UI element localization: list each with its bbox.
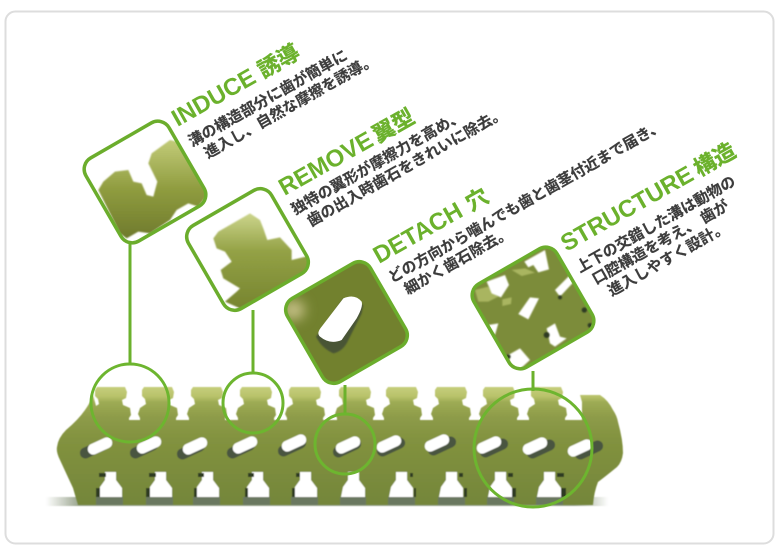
description: 進入しやすく設計。 <box>605 219 731 300</box>
description: 上下の交錯した溝は動物の <box>573 172 739 276</box>
product photo: green dental chew bar <box>46 387 623 506</box>
rounded frame <box>79 116 211 248</box>
heading: 誘導 <box>253 39 304 83</box>
bar silhouette <box>57 387 623 505</box>
dark hole edges <box>96 473 566 497</box>
heading <box>274 103 419 201</box>
connector line <box>344 385 346 415</box>
ground strip between legs <box>96 497 563 505</box>
callout: DETACH <box>280 117 675 474</box>
description: どの方向から噛んでも歯と歯茎付近まで届き、 <box>385 117 667 286</box>
heading: REMOVE <box>274 127 378 201</box>
rounded frame <box>467 242 599 374</box>
close-up photo <box>287 263 406 382</box>
slot openings <box>86 433 594 458</box>
close-up photo <box>474 248 592 367</box>
connector line <box>532 371 534 391</box>
zoom circle on bar <box>315 414 375 474</box>
heading: 翼型 <box>368 104 419 147</box>
heading: DETACH <box>369 197 467 269</box>
description: 進入し、自然な摩擦を誘導。 <box>201 51 380 162</box>
heading: 穴 <box>461 184 493 216</box>
description: 口腔構造を考え、 歯が <box>589 197 732 288</box>
heading <box>369 183 493 269</box>
slot shadows <box>78 435 605 461</box>
description: 細かく歯石除去。 <box>401 223 514 298</box>
description: 歯の出入時歯石をきれいに除去。 <box>304 104 509 230</box>
callout: STRUCTURE <box>465 137 756 507</box>
bottom gaps between legs <box>98 472 561 497</box>
heading: STRUCTURE <box>556 161 698 257</box>
ground shadow <box>46 497 608 506</box>
description <box>573 172 756 308</box>
heading <box>556 137 740 257</box>
description: 溝の構造部分に歯が簡単に <box>185 46 351 150</box>
rounded frame <box>281 257 412 388</box>
zoom circle on bar <box>474 389 592 507</box>
callout: INDUCE <box>79 35 380 442</box>
close-up photo <box>98 140 208 238</box>
connector line <box>128 244 132 365</box>
heading: INDUCE <box>167 63 261 132</box>
description: 独特の翼形が摩擦力を高め、 <box>288 107 467 218</box>
close-up photo <box>213 213 312 308</box>
rounded frame <box>182 184 313 315</box>
zoom circle on bar <box>91 364 169 442</box>
callout: REMOVE <box>182 88 509 433</box>
connector line <box>252 310 254 374</box>
heading <box>167 39 304 132</box>
zoom circle on bar <box>223 373 283 433</box>
heading: 構造 <box>689 138 740 181</box>
